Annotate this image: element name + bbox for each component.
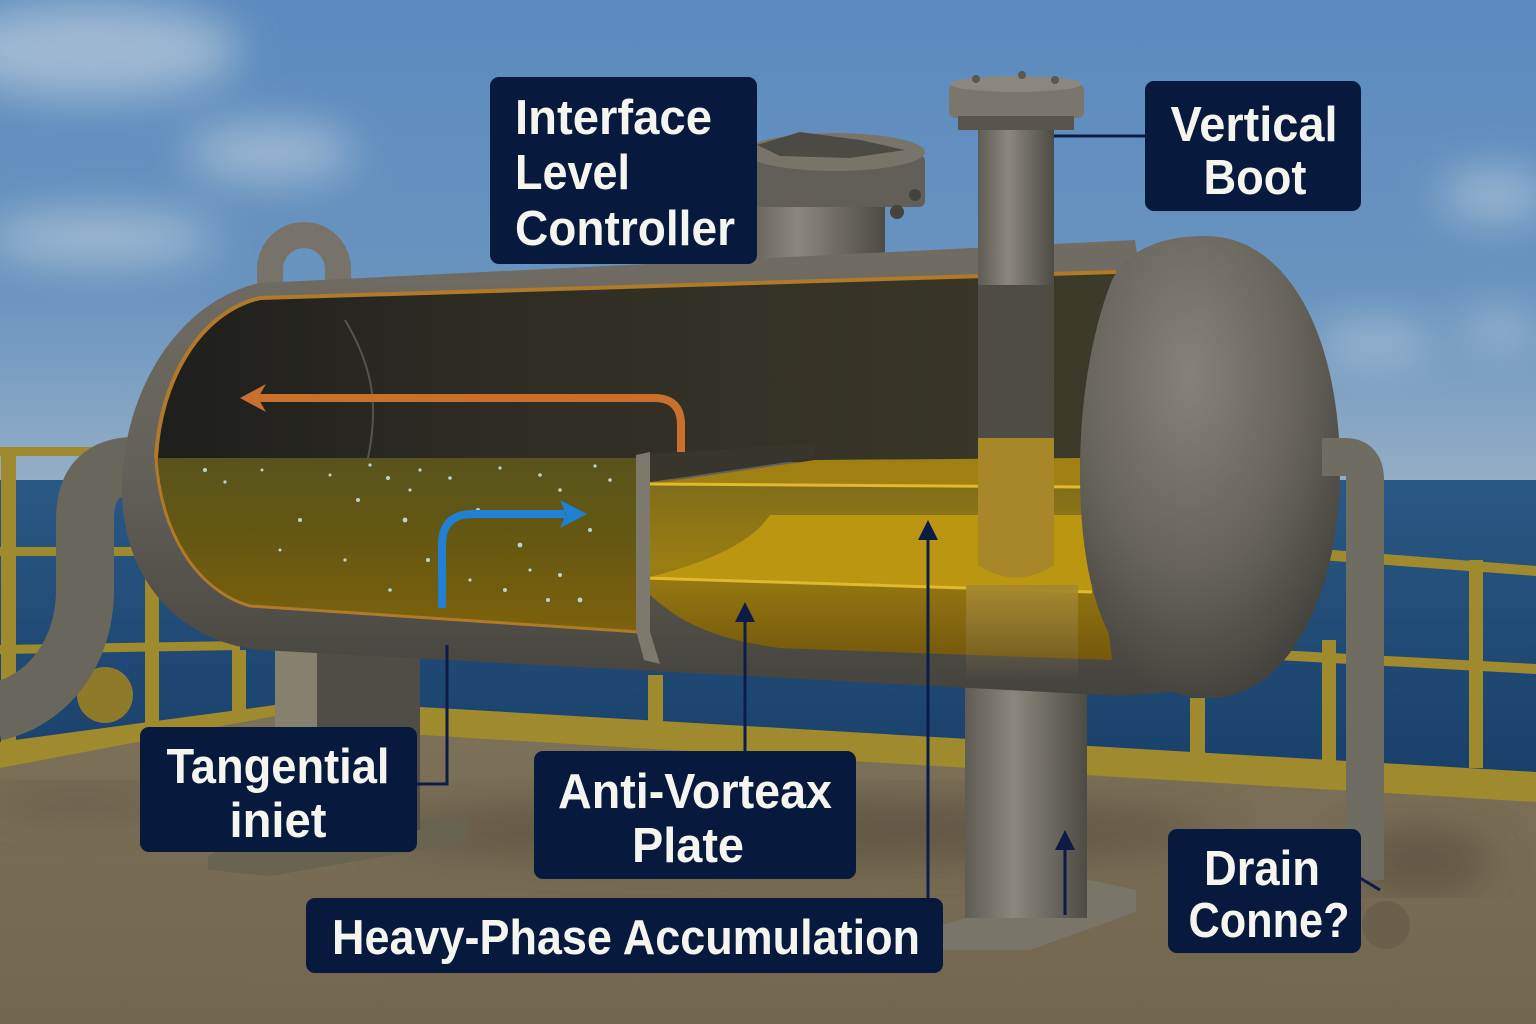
yellow safety railing xyxy=(0,447,1536,802)
deck shadow xyxy=(0,790,1490,888)
label: Interface Level Controller: Controller xyxy=(515,202,735,256)
vessel interior: liquid section xyxy=(156,458,640,632)
label: Heavy-Phase Accumulation xyxy=(306,898,943,973)
top flange: interface level controller nozzle xyxy=(740,132,925,270)
label: Tangential inlet: iniet xyxy=(230,794,326,848)
background: deck xyxy=(0,706,1536,1024)
label: Tangential inlet xyxy=(140,727,417,852)
label: Tangential inlet: Tangential xyxy=(166,740,390,794)
label: Interface Level Controller xyxy=(490,77,757,264)
label: Interface Level Controller: Level xyxy=(515,146,630,200)
lifting lug xyxy=(270,235,338,288)
label: Anti-Vortex Plate: Anti-Vorteax xyxy=(558,765,832,819)
vertical boot lower leg xyxy=(942,650,1136,950)
label: Drain Connection: Drain xyxy=(1204,842,1320,896)
left saddle support xyxy=(208,630,468,876)
drain pipe xyxy=(1322,457,1410,949)
vertical boot top flange xyxy=(949,71,1084,130)
leader arrows xyxy=(415,136,1380,915)
internal vertical boot column xyxy=(966,100,1078,680)
background: clouds xyxy=(0,0,1536,358)
vessel interior: yellow heavy-phase bay xyxy=(645,458,1112,660)
label: Vertical Boot: Boot xyxy=(1204,151,1306,205)
background: sea xyxy=(0,480,1536,800)
label: Anti-Vortex Plate xyxy=(534,751,856,879)
label: Vertical Boot xyxy=(1145,81,1361,211)
arrow: inlet flow blue xyxy=(442,500,587,608)
label: Drain Connection xyxy=(1168,829,1361,953)
label: Heavy-Phase Accumulation: Heavy-Phase Accumulation xyxy=(332,911,920,965)
baffle weir xyxy=(635,443,815,664)
label: Drain Connection: Conne? xyxy=(1188,894,1350,948)
vessel shell xyxy=(122,240,1200,696)
vessel interior: upper gas chamber xyxy=(156,272,1116,470)
inlet pipe xyxy=(0,466,130,712)
background: sky xyxy=(0,0,1536,490)
label: Anti-Vortex Plate: Plate xyxy=(632,819,744,873)
label: Interface Level Controller: Interface xyxy=(515,91,712,145)
interior rim highlight xyxy=(156,272,1116,458)
arrow: gas flow orange xyxy=(240,384,681,452)
vessel dome head xyxy=(1080,236,1340,698)
inner head curve xyxy=(345,320,373,458)
label: Vertical Boot: Vertical xyxy=(1170,98,1338,152)
